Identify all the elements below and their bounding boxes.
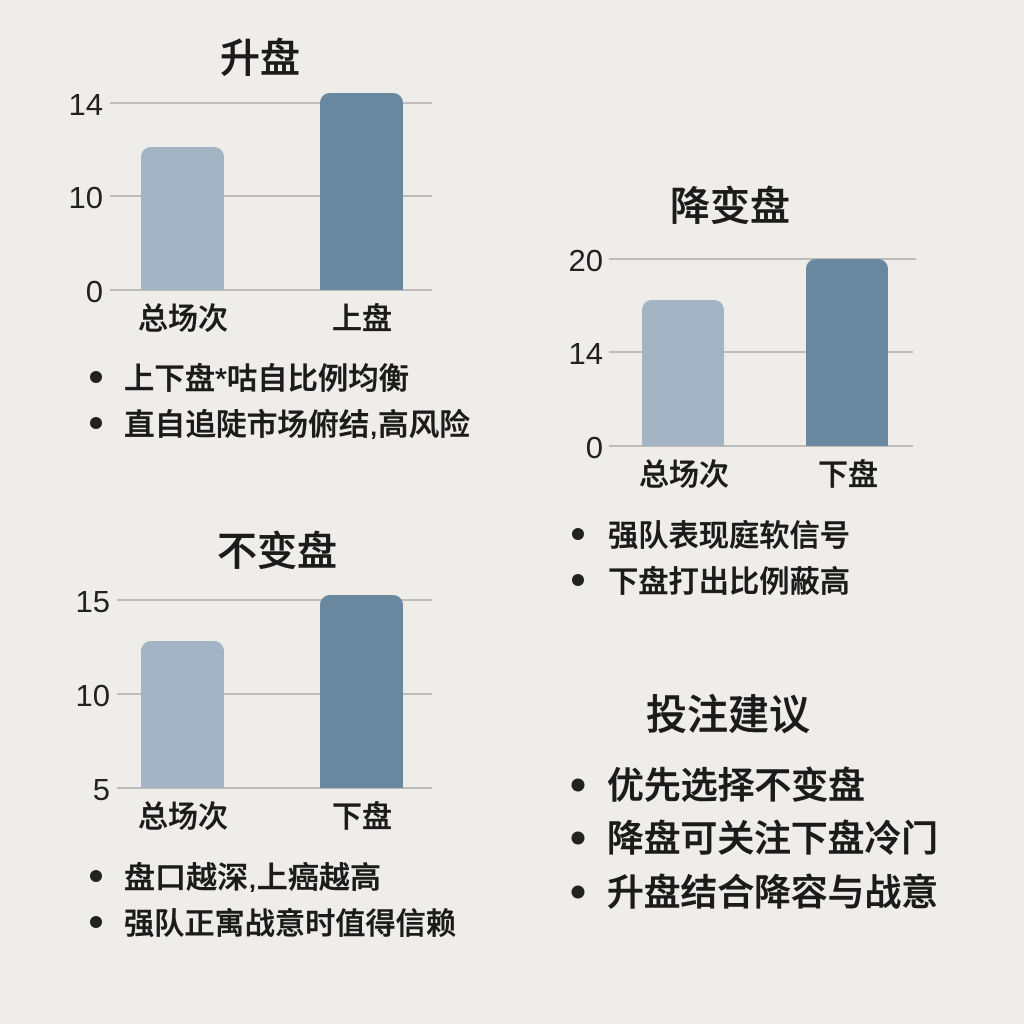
bar chart: 不变盘: 10	[76, 678, 110, 713]
bar chart: 不变盘: 下盘	[332, 801, 392, 834]
panel: 不变盘	[76, 530, 456, 941]
bar chart: 不变盘	[76, 584, 432, 834]
bullet list: 降变盘 notes	[572, 520, 850, 599]
panel: 升盘	[69, 37, 470, 442]
bar chart: 升盘: 14	[69, 87, 103, 122]
bar chart: 不变盘: 15	[76, 584, 110, 619]
panel: 降变盘	[569, 185, 916, 599]
bullet list: 不变盘 notes: 盘口越深,上癌越高	[124, 862, 381, 895]
bar chart: 降变盘	[569, 243, 916, 492]
bullet list: 升盘 notes: 上下盘*咕自比例均衡	[124, 363, 409, 396]
heading: 不变盘: 不变盘	[217, 530, 337, 574]
bullet list: 不变盘 notes: 强队正寓战意时值得信赖	[124, 908, 456, 941]
bullet list: 不变盘 notes	[90, 862, 456, 941]
bar chart: 升盘: 上盘	[332, 303, 392, 336]
bullet list: 升盘 notes	[90, 363, 470, 442]
recommendation list: 升盘结合降容与战意	[607, 872, 938, 913]
bar chart: 不变盘: 5	[93, 772, 110, 807]
bullet list: 升盘 notes: 直自追陡市场俯结,高风险	[124, 409, 470, 442]
bar chart: 不变盘: 总场次	[138, 801, 228, 834]
bar chart: 降变盘: 下盘	[818, 459, 878, 492]
bar chart: 降变盘: 0	[586, 430, 603, 465]
bar chart: 升盘: 10	[69, 180, 103, 215]
recommendation list: 降盘可关注下盘冷门	[607, 818, 938, 859]
bar chart: 降变盘: 14	[569, 336, 603, 371]
bar chart: 降变盘: 总场次	[639, 459, 729, 492]
heading: 降变盘: 降变盘	[670, 185, 790, 229]
bullet list: 降变盘 notes: 下盘打出比例蔽高	[608, 566, 850, 599]
recommendation list	[572, 765, 938, 913]
bar chart: 升盘: 0	[86, 274, 103, 309]
heading: 投注建议: 投注建议	[646, 692, 810, 738]
bar chart: 升盘: 总场次	[138, 303, 228, 336]
bullet list: 降变盘 notes: 强队表现庭软信号	[608, 520, 850, 553]
panel: 投注建议	[572, 692, 938, 913]
bar chart: 降变盘: 20	[569, 243, 603, 278]
recommendation list: 优先选择不变盘	[607, 765, 865, 806]
bar chart: 升盘	[69, 87, 432, 336]
heading: 升盘: 升盘	[220, 37, 300, 81]
